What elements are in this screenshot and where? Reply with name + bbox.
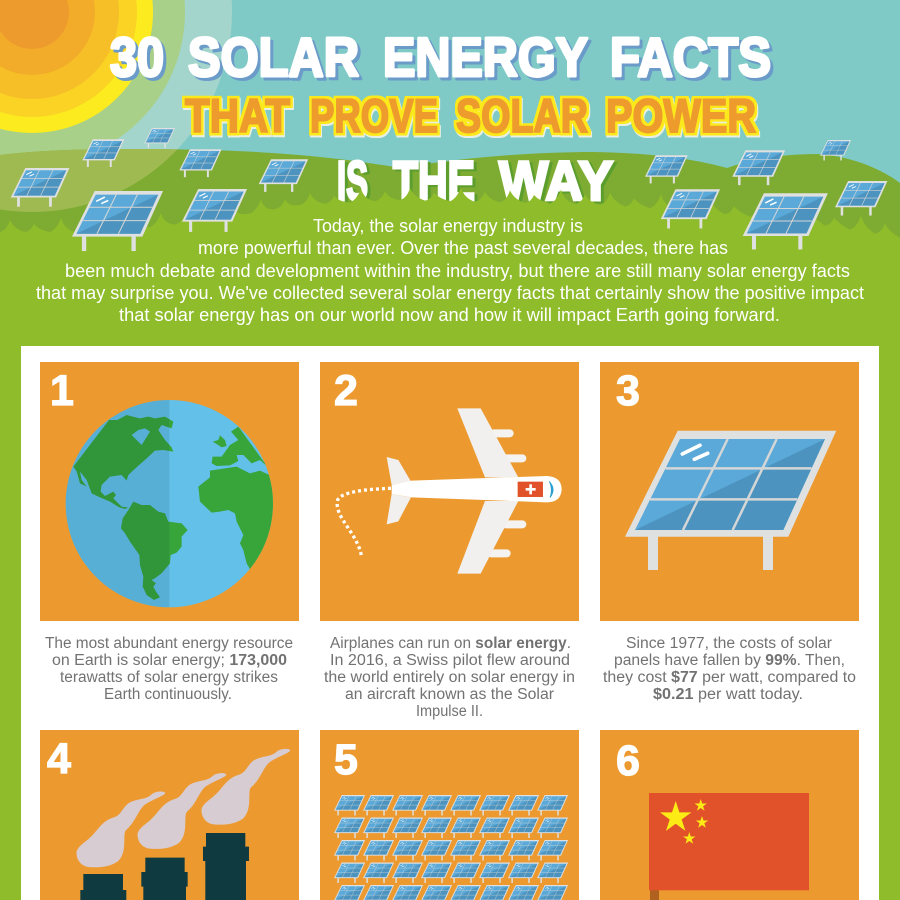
- wings and tail: [387, 408, 518, 574]
- title line 2: SOLAR: [456, 89, 588, 142]
- intro paragraph: that may surprise you. We've collected several solar energy facts that certainly show the positive impact: [36, 282, 864, 303]
- title line 1: ENERGY: [383, 26, 588, 88]
- fact 1 card: [40, 362, 299, 703]
- fact 6 card: [600, 730, 859, 900]
- fact 1 text: Earth continuously.: [104, 686, 232, 703]
- background sky: [0, 0, 900, 300]
- title line 2: THAT: [185, 89, 290, 142]
- fact 3 text: [603, 635, 856, 703]
- title line 1: FACTS: [610, 26, 771, 88]
- fact 3 background: [600, 362, 859, 621]
- foreground grass: [0, 187, 900, 900]
- icon: smokestacks: [76, 749, 290, 900]
- fact 1 text: The most abundant energy resource: [45, 635, 293, 652]
- fact 3 text: they cost $77 per watt, compared to: [603, 669, 856, 686]
- fact 6 number: 6: [616, 737, 640, 785]
- Swiss flag: [518, 482, 543, 497]
- intro paragraph: [36, 215, 864, 325]
- fact 1 text: on Earth is solar energy; 173,000: [52, 652, 287, 669]
- icon: airplane: [337, 408, 562, 574]
- title line 3: WAY: [499, 149, 613, 212]
- fact 6 background: [600, 730, 859, 900]
- icon: solar panel field: [334, 795, 568, 900]
- intro paragraph: Today, the solar energy industry is: [313, 215, 583, 236]
- fact 2 text: Impulse II.: [416, 703, 483, 720]
- title line 2: [185, 89, 756, 142]
- fact 5 number: 5: [334, 736, 358, 784]
- engines: [487, 429, 526, 557]
- windshield: [549, 481, 553, 498]
- fact 1 background: [40, 362, 299, 621]
- title line 2: PROVE: [310, 89, 438, 142]
- flag field: [649, 793, 809, 890]
- intro paragraph: that solar energy has on our world now and how it will impact Earth going forward.: [119, 304, 780, 325]
- fuselage: [392, 476, 562, 502]
- fact 4 card: [40, 730, 299, 900]
- title line 3: THE: [393, 149, 475, 212]
- flag pole: [650, 890, 659, 900]
- title line 2: POWER: [606, 89, 756, 142]
- fact 2 text: an aircraft known as the Solar: [345, 686, 554, 703]
- icon: solar panel: [625, 431, 836, 570]
- title line 1: 30: [110, 26, 164, 88]
- dotted flight trail: [337, 488, 391, 557]
- fact 2 number: 2: [334, 367, 358, 415]
- fact 2 text: [324, 635, 575, 720]
- fact 3 card: [600, 362, 859, 703]
- fact 3 text: panels have fallen by 99%. Then,: [614, 652, 845, 669]
- fact 5 background: [320, 730, 579, 900]
- title line 3: [337, 149, 613, 212]
- fact 2 text: In 2016, a Swiss pilot flew around: [330, 652, 570, 669]
- fact 3 text: $0.21 per watt today.: [653, 686, 803, 703]
- smoke plumes: [76, 749, 290, 867]
- fact 1 number: 1: [50, 367, 74, 415]
- fact 1 text: terawatts of solar energy strikes: [60, 669, 278, 686]
- fact 3 text: Since 1977, the costs of solar: [626, 635, 832, 652]
- flag stars: [660, 799, 708, 844]
- sun glow halos: [0, 0, 232, 212]
- fact 2 text: Airplanes can run on solar energy.: [330, 635, 571, 652]
- title line 1: SOLAR: [188, 26, 359, 88]
- title line 1: [110, 26, 771, 88]
- sun: [0, 0, 153, 133]
- chimneys: [80, 833, 249, 900]
- fact 5 card: [320, 730, 579, 900]
- fact 1 text: [45, 635, 293, 703]
- fact 4 background: [40, 730, 299, 900]
- distant green hills: [0, 149, 900, 238]
- fact 2 text: the world entirely on solar energy in: [324, 669, 575, 686]
- fact 3 number: 3: [616, 367, 640, 415]
- solar panels scattered on the hills: [11, 128, 887, 251]
- icon: China flag: [649, 793, 809, 900]
- fact 2 card: [320, 362, 579, 720]
- title line 3: IS: [337, 149, 368, 212]
- fact 2 background: [320, 362, 579, 621]
- icon: globe: [60, 393, 277, 613]
- white facts panel: [21, 346, 879, 900]
- intro paragraph: more powerful than ever. Over the past several decades, there has: [198, 237, 728, 258]
- intro paragraph: been much debate and development within the industry, but there are still many solar energy facts: [65, 260, 850, 281]
- fact 4 number: 4: [47, 735, 71, 783]
